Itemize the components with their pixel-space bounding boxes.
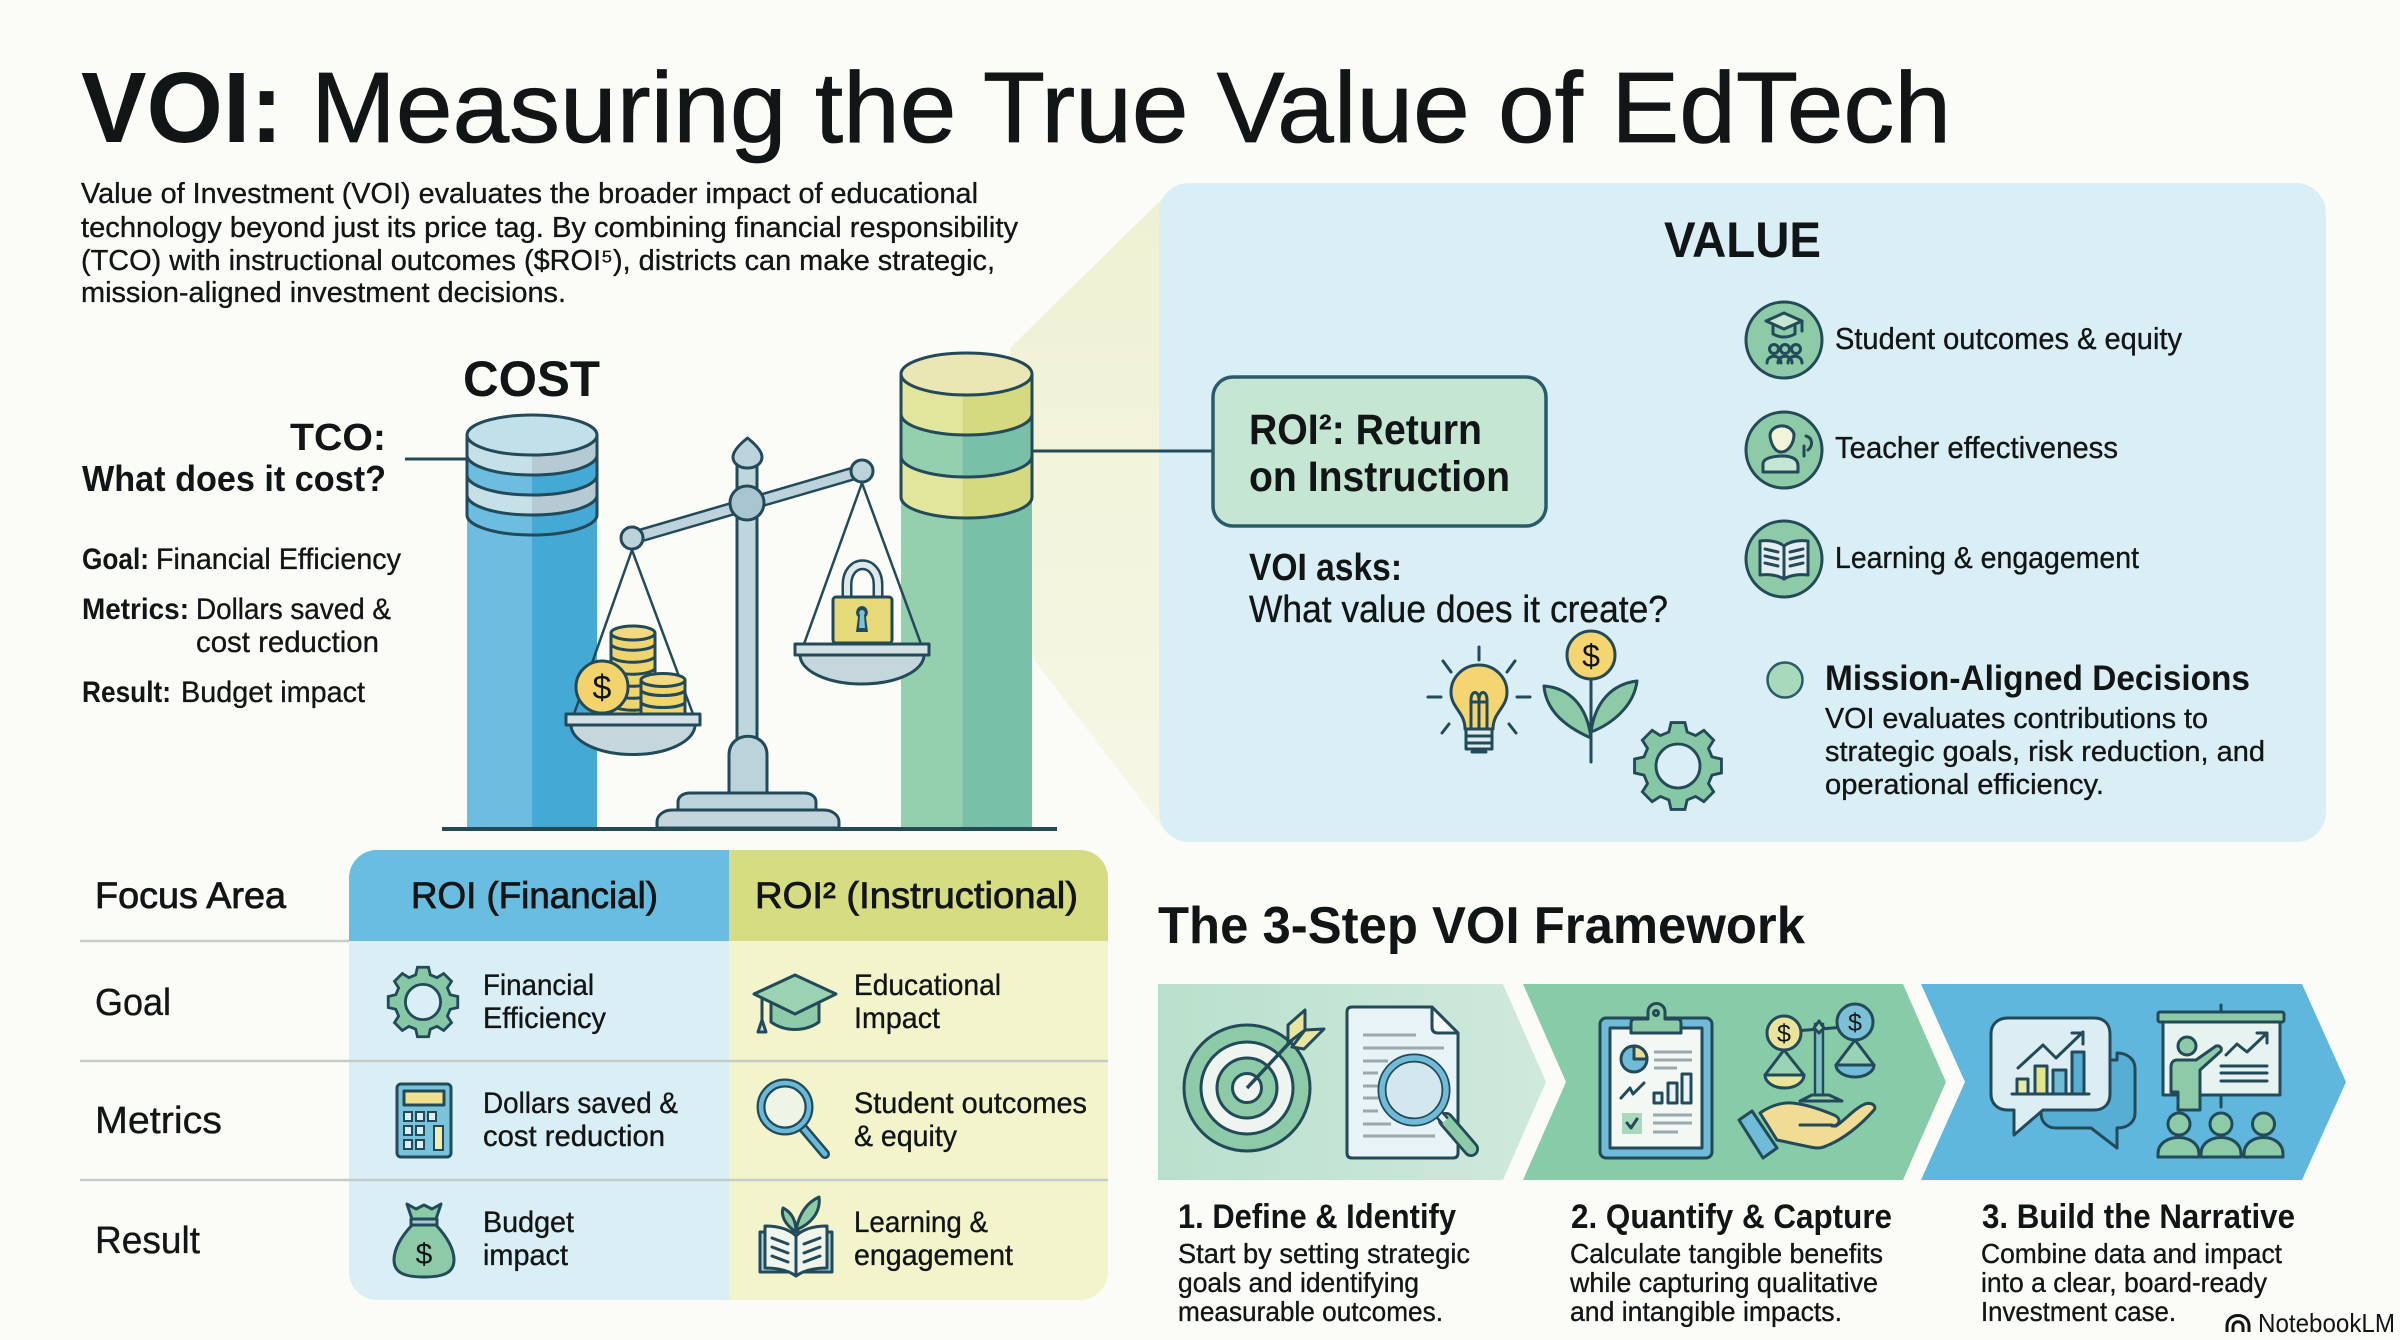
step 1 text: Start by setting strategic: [1178, 1238, 1470, 1269]
cell: learning and engagement: [854, 1206, 1014, 1272]
TCO label: [82, 417, 468, 499]
icon: document with magnifier: [1347, 1007, 1471, 1158]
cost details list: Financial Efficiency: [156, 543, 401, 576]
icon: calculator: [397, 1084, 451, 1157]
intro text block: Value of Investment (VOI) evaluates the broader impact of educational: [81, 178, 978, 210]
mission aligned decisions: [1768, 659, 2265, 801]
framework heading: The 3-Step VOI Framework: [1158, 897, 1805, 955]
base line: [442, 827, 1057, 831]
intro text block: mission-aligned investment decisions.: [81, 277, 566, 309]
TCO label: TCO:: [290, 417, 386, 459]
title: Measuring the True Value of EdTech: [311, 52, 1951, 164]
header: ROI financial: ROI (Financial): [411, 875, 658, 916]
intro text block: (TCO) with instructional outcomes ($ROI⁵), districts can make strategic,: [81, 245, 995, 277]
comparison table: [80, 850, 1108, 1300]
cell: budget impact: [483, 1206, 575, 1272]
connector line to ROI box: [1030, 450, 1213, 452]
intro text block: technology beyond just its price tag. By combining financial responsibility: [81, 212, 1018, 244]
step 3 chevron: [1921, 984, 2346, 1180]
icon: teacher: [1746, 412, 1822, 488]
icon: book with sprout: [760, 1197, 832, 1276]
cost details list: Dollars saved &: [196, 593, 391, 626]
step 2 text: and intangible impacts.: [1570, 1296, 1842, 1327]
step 1 chevron: [1158, 984, 1546, 1180]
right pan: [795, 644, 929, 684]
scale hub: [730, 486, 764, 520]
row labels: Focus Area: [95, 875, 286, 916]
icon: gear goal: [388, 967, 458, 1037]
mission aligned decisions: operational efficiency.: [1825, 769, 2104, 801]
value heading: VALUE: [1664, 212, 1821, 268]
value item: learning and engagement: Learning & engagement: [1835, 540, 2139, 575]
VOI asks question: VOI asks:: [1249, 547, 1402, 589]
icon: gear: [1635, 723, 1721, 809]
cell: student outcomes: [854, 1087, 1087, 1153]
cell: educational impact: Impact: [854, 1002, 941, 1035]
VOI asks question: [1249, 547, 1668, 631]
title: VOI:: [81, 52, 283, 164]
step 3 text: Combine data and impact: [1981, 1238, 2282, 1269]
icon: scale with coins over hand: $: [1777, 1020, 1791, 1048]
icon: plant with dollar coin: [1544, 631, 1637, 762]
icon: target with arrow: [1184, 1010, 1324, 1151]
cell: dollars saved: cost reduction: [483, 1120, 665, 1153]
header: ROI squared instructional: ROI² (Instructional): [755, 875, 1078, 916]
cell: learning and engagement: engagement: [854, 1239, 1014, 1272]
step 2 text: while capturing qualitative: [1569, 1267, 1878, 1298]
icon: chat bubbles with chart: [1991, 1018, 2135, 1148]
cost details list: Goal:: [82, 543, 149, 576]
scale beam: [632, 471, 862, 538]
row labels: Metrics: [95, 1100, 222, 1142]
icon: lightbulb: [1428, 647, 1530, 752]
coin stack on left pan: $: [593, 669, 612, 707]
cell: educational impact: Educational: [854, 969, 1001, 1002]
step 2 text: 2. Quantify & Capture: [1571, 1198, 1892, 1236]
cell: learning and engagement: Learning &: [854, 1206, 988, 1239]
icon: clipboard with charts: [1600, 1004, 1712, 1158]
cost details list: [82, 543, 401, 709]
step 3 text: [1981, 1198, 2295, 1327]
balance scale: [566, 438, 929, 828]
value item: student outcomes: Student outcomes & equity: [1835, 321, 2182, 356]
icon: scale with coins over hand: $: [1848, 1009, 1862, 1037]
cell: educational impact: [854, 969, 1001, 1035]
row labels: Result: [95, 1220, 200, 1262]
step 1 text: measurable outcomes.: [1178, 1296, 1443, 1327]
cell: budget impact: impact: [483, 1239, 569, 1272]
icon: scale with coins over hand: [1739, 1004, 1875, 1158]
step 3 text: Investment case.: [1981, 1296, 2176, 1327]
mission aligned decisions: Mission-Aligned Decisions: [1825, 659, 2250, 698]
padlock on right pan: [833, 565, 892, 643]
cost cylinder column: [467, 415, 597, 828]
cell: financial efficiency: [483, 969, 606, 1035]
icon: graduation cap: [754, 975, 836, 1032]
header: ROI squared instructional: [729, 850, 1108, 941]
panel: value: [1030, 183, 2326, 842]
cell: student outcomes: Student outcomes: [854, 1087, 1087, 1120]
icon: money bag: [394, 1204, 454, 1277]
step 2 chevron: [1523, 984, 1946, 1180]
mission aligned decisions: strategic goals, risk reduction, and: [1825, 736, 2265, 768]
left pan: [566, 714, 700, 754]
step 1 text: goals and identifying: [1178, 1267, 1419, 1298]
step 1 text: [1178, 1198, 1470, 1327]
cell: dollars saved: [483, 1087, 678, 1153]
row labels: Goal: [95, 982, 171, 1024]
icon: presenter at board with audience: [2158, 1005, 2284, 1157]
ROI squared box: on Instruction: [1249, 453, 1510, 501]
step 1 text: 1. Define & Identify: [1178, 1198, 1456, 1236]
step 3 text: 3. Build the Narrative: [1982, 1198, 2295, 1236]
ROI squared box: [1213, 377, 1546, 526]
scale finial: [733, 438, 762, 468]
TCO label: What does it cost?: [82, 458, 386, 499]
yellow funnel connecting value column to panel: [1010, 196, 1165, 832]
header: ROI financial: [349, 850, 729, 941]
icon: open book: [1746, 521, 1822, 597]
row labels: [95, 875, 286, 1262]
scale strings: [574, 483, 921, 714]
icon: plant with dollar coin: $: [1582, 638, 1600, 674]
cell: financial efficiency: Financial: [483, 969, 594, 1002]
cost details list: Metrics:: [82, 593, 189, 626]
step 2 text: [1569, 1198, 1892, 1327]
coin stack on left pan: [576, 626, 685, 714]
cost details list: Budget impact: [181, 676, 366, 709]
value cylinder column: [901, 353, 1032, 828]
pedestal: [657, 736, 839, 828]
value item: teacher effectiveness: Teacher effectiveness: [1835, 430, 2118, 465]
icon: magnifying glass: [761, 1083, 825, 1154]
step 3 text: into a clear, board-ready: [1981, 1267, 2267, 1298]
VOI asks question: What value does it create?: [1249, 589, 1668, 631]
scale post: [737, 460, 757, 745]
icon: money bag: $: [416, 1238, 433, 1271]
cell: budget impact: Budget: [483, 1206, 575, 1239]
cell: dollars saved: Dollars saved &: [483, 1087, 678, 1120]
cost heading: COST: [463, 351, 600, 407]
ROI squared box: ROI²: Return: [1249, 406, 1482, 454]
intro text block: [81, 178, 1018, 309]
mission aligned decisions: VOI evaluates contributions to: [1825, 703, 2208, 735]
cost details list: cost reduction: [196, 626, 379, 659]
cell: financial efficiency: Efficiency: [483, 1002, 606, 1035]
step 2 text: Calculate tangible benefits: [1570, 1238, 1883, 1269]
icon: graduate and students: [1746, 302, 1822, 378]
cell: student outcomes: & equity: [854, 1120, 957, 1153]
table column fills: [349, 941, 729, 1300]
cost details list: Result:: [82, 676, 171, 709]
